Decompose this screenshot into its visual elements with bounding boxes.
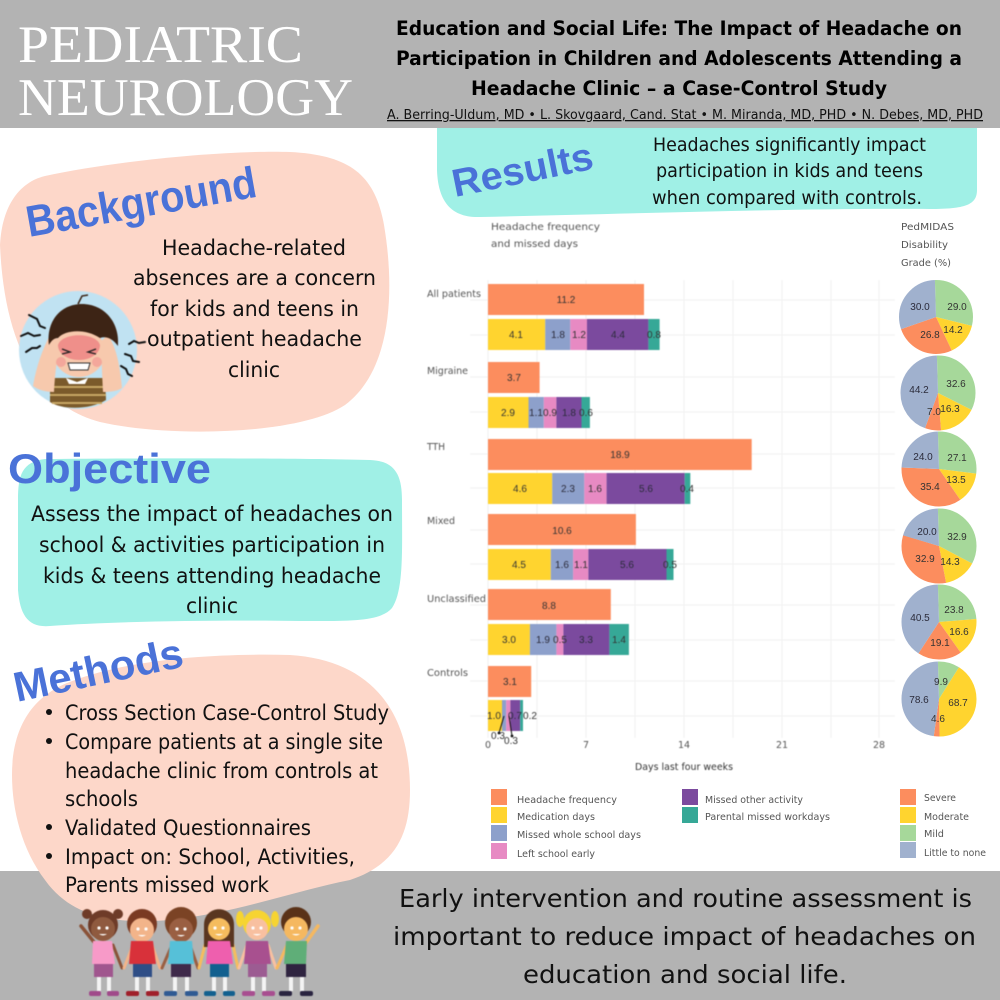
background text: outpatient headache [147, 327, 362, 351]
title [396, 17, 962, 100]
bars: all patients: 4.4 [611, 330, 625, 341]
bars: migraine [488, 362, 593, 428]
pie: unclassified [910, 603, 969, 649]
results text: participation in kids and teens [656, 160, 923, 182]
bars: all patients: 11.2 [557, 295, 576, 306]
bars: migraine: 1.8 [562, 408, 576, 419]
bars: controls: 0.7 [508, 711, 522, 722]
bars: all patients: 1.8 [551, 330, 565, 341]
bars: unclassified: 3.3 [579, 635, 593, 646]
header band [0, 0, 1000, 128]
conclusion text [393, 884, 976, 989]
row labels: TTH [426, 442, 445, 453]
pie: TTH: 13.5 [946, 475, 966, 486]
objective text [31, 502, 393, 618]
objective text: Assess the impact of headaches on [31, 502, 393, 526]
bars: TTH: 5.6 [639, 484, 653, 495]
x axis: 7 [583, 740, 589, 751]
child 5 [236, 910, 279, 996]
bars: migraine: 0.9 [543, 408, 557, 419]
methods list: headache clinic from controls at [65, 759, 378, 783]
row labels: Unclassified [427, 594, 486, 605]
legend: pies: Severe [924, 793, 956, 804]
pie: unclassified: 19.1 [930, 638, 950, 649]
pie: migraine [909, 374, 966, 418]
bars: mixed: 4.5 [512, 560, 526, 571]
heading: objective: Objective [8, 445, 211, 492]
row labels [426, 289, 486, 679]
bars: TTH [488, 439, 752, 504]
row labels: Migraine [427, 366, 468, 377]
legend: bars: Left school early [517, 849, 595, 860]
background text [133, 236, 376, 382]
legend: bars [491, 789, 830, 860]
chart: headache frequency and missed days [426, 222, 895, 773]
journal name: NEUROLOGY [18, 69, 353, 127]
legend: bars: Missed other activity [705, 795, 803, 806]
bars: TTH: 4.6 [513, 484, 527, 495]
bars: unclassified: 3.0 [502, 635, 516, 646]
objective text: clinic [186, 594, 238, 618]
pie: migraine: 16.3 [940, 404, 960, 415]
pie: all patients: 26.8 [920, 330, 940, 341]
bars: all patients: 4.1 [509, 330, 523, 341]
pie: unclassified: 40.5 [910, 613, 930, 624]
results text: when compared with controls. [652, 187, 922, 209]
pie: TTH: 24.0 [913, 452, 933, 463]
bars: unclassified: 0.5 [553, 635, 567, 646]
background text: absences are a concern [133, 266, 376, 290]
methods list: Compare patients at a single site [65, 730, 383, 754]
pie: all patients: 30.0 [910, 302, 930, 313]
bars: controls: 3.1 [503, 677, 517, 688]
bars: unclassified: 1.4 [612, 635, 626, 646]
panel: methods [9, 629, 410, 921]
results text [652, 134, 926, 209]
bars: controls: 0.2 [523, 711, 537, 722]
footer band [0, 871, 1000, 1000]
pie: all patients: 14.2 [943, 325, 963, 336]
legend: bars: Headache frequency [517, 795, 617, 806]
pie: TTH [913, 450, 967, 493]
panel: background [0, 152, 389, 432]
icon: children holding hands [81, 907, 318, 996]
objective text: school & activities participation in [39, 533, 385, 557]
panel: objective [8, 445, 402, 626]
methods list [46, 701, 389, 897]
bars: TTH: 18.9 [610, 450, 630, 461]
bars: mixed [488, 514, 677, 580]
pie: migraine: 7.0 [927, 407, 941, 418]
bars: controls [487, 666, 537, 747]
pie: TTH: 35.4 [920, 482, 940, 493]
pie: controls: 4.6 [931, 714, 945, 725]
bars: migraine: 2.9 [501, 408, 515, 419]
methods list: schools [65, 787, 138, 811]
pie: TTH: 27.1 [947, 453, 967, 464]
methods list: Impact on: School, Activities, [65, 845, 355, 869]
bars: TTH: 1.6 [588, 484, 602, 495]
x axis: 21 [776, 740, 788, 751]
methods list: Cross Section Case-Control Study [65, 701, 389, 725]
title: Headache Clinic – a Case-Control Study [471, 77, 887, 100]
chart headings [491, 222, 600, 250]
child 3 [162, 907, 198, 996]
icon: boy with headache [19, 291, 145, 409]
methods list: Validated Questionnaires [65, 816, 311, 840]
pies heading: Disability [901, 240, 948, 251]
pie: mixed: 32.9 [947, 532, 967, 543]
pies heading: PedMIDAS [901, 222, 954, 233]
x axis [485, 740, 885, 773]
pie: unclassified: 23.8 [944, 605, 964, 616]
bars: all patients: 1.2 [572, 330, 586, 341]
x axis: Days last four weeks [635, 762, 733, 773]
pie: migraine: 44.2 [909, 385, 929, 396]
bars: mixed: 1.1 [574, 560, 588, 571]
pies heading [901, 222, 954, 269]
pie: controls: 9.9 [934, 677, 948, 688]
x axis: 28 [873, 740, 885, 751]
pie: all patients: 29.0 [947, 302, 967, 313]
pies heading: Grade (%) [901, 258, 951, 269]
heading: background: Background [22, 158, 260, 247]
legend: pies [900, 789, 986, 859]
authors: A. Berring-Uldum, MD • L. Skovgaard, Cand. Stat • M. Miranda, MD, PHD • N. Debes, MD, PHD [387, 108, 983, 123]
conclusion text: important to reduce impact of headaches on [393, 922, 976, 951]
child 1 [81, 909, 123, 996]
pie: controls: 78.6 [909, 695, 929, 706]
child 2 [124, 909, 160, 996]
legend: bars: Missed whole school days [517, 830, 641, 841]
bars: unclassified: 1.9 [536, 635, 550, 646]
bars: TTH: 0.4 [680, 484, 694, 495]
bars: migraine: 3.7 [507, 373, 521, 384]
conclusion text: Early intervention and routine assessment is [399, 884, 972, 913]
bars: mixed: 5.6 [620, 560, 634, 571]
objective text: kids & teens attending headache [43, 564, 381, 588]
pie: mixed: 20.0 [917, 527, 937, 538]
chart headings: and missed days [491, 239, 578, 250]
pie: unclassified: 16.6 [949, 627, 969, 638]
bars: migraine: 0.6 [579, 408, 593, 419]
bars: TTH: 2.3 [561, 484, 575, 495]
background text: for kids and teens in [150, 297, 359, 321]
pie: controls [909, 677, 968, 725]
pie: mixed: 32.9 [915, 554, 935, 565]
heading: results: Results [448, 135, 597, 206]
legend: bars: Parental missed workdays [705, 812, 830, 823]
bars: controls: 0.3 [491, 731, 505, 742]
legend: pies: Moderate [924, 812, 969, 823]
methods list: Parents missed work [65, 873, 270, 897]
background text: clinic [228, 358, 280, 382]
bars: mixed: 0.5 [663, 560, 677, 571]
pie: mixed: 14.3 [940, 557, 960, 568]
legend: pies: Little to none [924, 848, 986, 859]
journal name [18, 16, 353, 127]
legend: pies: Mild [924, 829, 944, 840]
bars: all patients [488, 284, 661, 350]
legend: bars: Medication days [517, 812, 595, 823]
row labels: Mixed [427, 516, 455, 527]
conclusion text: education and social life. [523, 960, 847, 989]
results text: Headaches significantly impact [653, 134, 926, 156]
background text: Headache-related [162, 236, 346, 260]
bars: unclassified [488, 589, 629, 655]
title: Education and Social Life: The Impact of Headache on [396, 17, 962, 40]
pie: migraine: 32.6 [946, 379, 966, 390]
pie: mixed [915, 527, 967, 568]
row labels: Controls [427, 668, 468, 679]
panel: results [437, 128, 977, 217]
bars: controls: 0.3 [504, 736, 518, 747]
row labels: All patients [427, 289, 481, 300]
child 6 [277, 907, 318, 996]
x axis: 0 [485, 740, 491, 751]
bars: mixed: 1.6 [555, 560, 569, 571]
title: Participation in Children and Adolescents Attending a [396, 47, 962, 70]
bars: all patients: 0.8 [647, 330, 661, 341]
pie: controls: 68.7 [948, 698, 968, 709]
pie: all patients [910, 298, 967, 341]
bars: unclassified: 8.8 [542, 601, 556, 612]
bars: mixed: 10.6 [552, 526, 572, 537]
chart headings: Headache frequency [491, 222, 600, 233]
bars: migraine: 1.1 [529, 408, 543, 419]
x axis: 14 [678, 740, 690, 751]
heading: methods: Methods [9, 629, 187, 711]
journal name: PEDIATRIC [18, 16, 303, 74]
child 4 [199, 909, 238, 996]
bars: controls: 1.0 [487, 711, 501, 722]
